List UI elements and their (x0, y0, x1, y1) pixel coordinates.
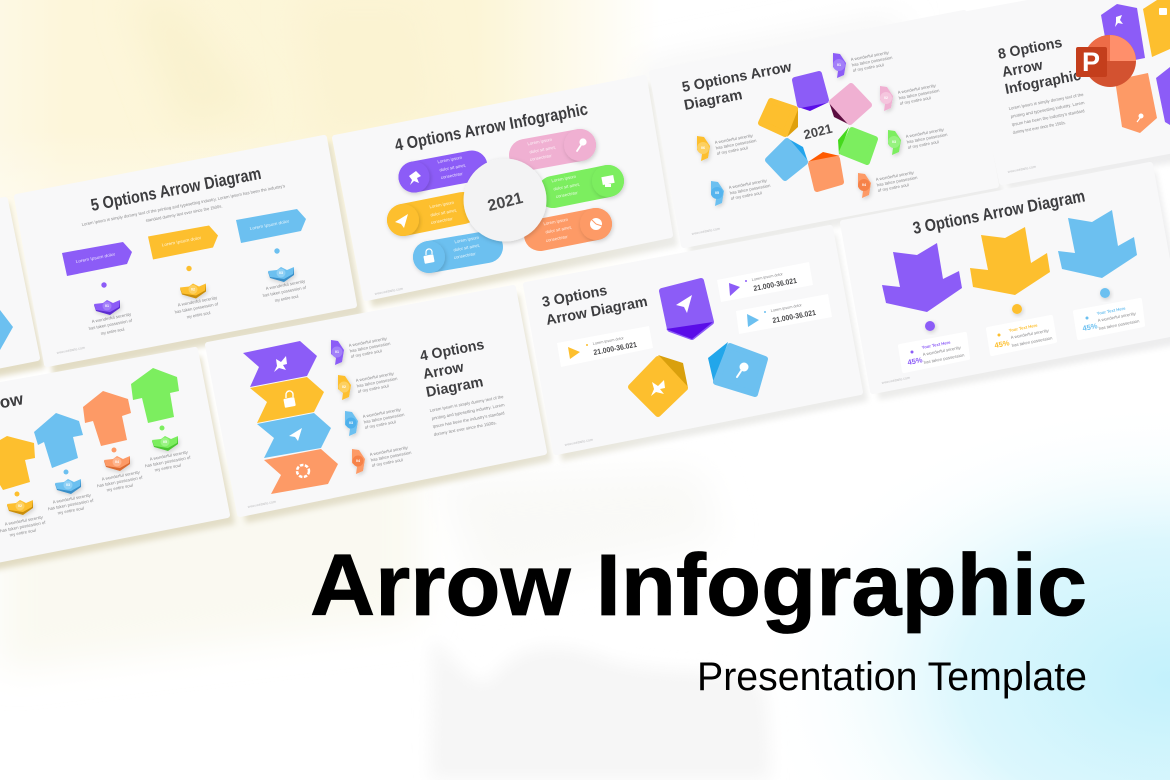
callout 1 purple: has taken possession (851, 55, 893, 67)
card purple: has taken possession (923, 352, 965, 365)
option 1 purple: 01 (105, 304, 109, 308)
node dots (925, 288, 1110, 331)
callout 5 blue (711, 178, 771, 206)
body text (429, 394, 505, 437)
arrow purple (882, 243, 962, 312)
callout 1 purple: A wonderful serenity (850, 50, 890, 62)
panel: 3 options arrow diagram, center (526, 228, 860, 452)
panel: arrow options, bottom left (0, 350, 227, 575)
pill orange: dolor sit amet, (545, 225, 572, 235)
heading: Arrow Diagram (545, 294, 649, 329)
callout 1 (331, 336, 391, 365)
callout 5 blue: of my entire soul (730, 190, 762, 201)
pill pink (525, 129, 596, 162)
center circle 2021: 2021 (486, 190, 525, 215)
callout 1 purple (833, 50, 893, 78)
hexagon yellow (1143, 0, 1170, 57)
footer: www.website.com (247, 500, 276, 509)
data card 2 (736, 294, 832, 334)
data card 2: 21.000-36.021 (772, 308, 817, 325)
card blue: has taken possession (1098, 318, 1140, 331)
panel: 3 options arrow diagram, bottom right (843, 165, 1170, 391)
card purple (900, 334, 968, 371)
panel: 5 options arrow diagram, right (652, 13, 996, 245)
arrow orange (264, 449, 338, 494)
heading: 4 Options Arrow Infographic (393, 100, 589, 155)
callout 3: A wonderful serenity (362, 407, 402, 419)
card yellow (988, 317, 1055, 354)
option blue: my entire soul (57, 506, 84, 515)
pill blue: dolor sit amet, (453, 243, 480, 253)
arrow yellow (970, 227, 1050, 295)
callout 3 green (888, 127, 948, 155)
heading: 5 Options Arrow Diagram (89, 164, 263, 215)
pill pink: Lorem ipsum (527, 137, 553, 146)
data card 1: 21.000-36.021 (753, 276, 798, 293)
card blue (1075, 300, 1143, 338)
callout 6 yellow (697, 133, 757, 161)
callout 6 yellow: of my entire soul (716, 145, 748, 156)
heading: 8 Options (997, 35, 1064, 63)
callout 3: of my entire soul (364, 419, 396, 430)
arrow blue (34, 413, 83, 468)
icon: magnifier (1137, 114, 1144, 122)
hexagon orange (1115, 73, 1157, 133)
data card 3: 21.000-36.021 (593, 340, 638, 357)
callout 5 blue: 05 (715, 191, 719, 195)
callout 3: has taken possession (363, 412, 405, 424)
callout 4 orange: 04 (862, 183, 866, 187)
callout 4 (352, 445, 412, 474)
pill yellow: dolor sit amet, (430, 208, 457, 218)
callout 3: 03 (349, 421, 353, 425)
body text (1008, 92, 1085, 135)
2021 label: 2021 (802, 121, 834, 142)
option 2 yellow: A wonderful serenity (177, 295, 218, 307)
card yellow: Your Text Here (1008, 322, 1038, 333)
callout 1 purple: 01 (837, 63, 841, 67)
option orange (97, 448, 144, 492)
body text: printing and typesetting industry. Lorem (1010, 100, 1085, 119)
option orange: my entire soul (106, 483, 133, 492)
arrow green (131, 368, 179, 423)
callout 6 yellow: 06 (701, 146, 705, 150)
icon: powerpoint logo (1076, 35, 1136, 87)
card yellow: A wonderful serenity (1010, 328, 1050, 340)
card blue: 45% (1082, 321, 1098, 333)
option yellow: 02 (18, 504, 22, 508)
pin blue (708, 342, 765, 394)
card yellow: 45% (994, 338, 1010, 350)
arrow icons (274, 356, 309, 477)
option green: has taken possession of (145, 455, 192, 468)
pill yellow (387, 200, 463, 236)
option orange: A wonderful serenity (101, 469, 141, 482)
panel: 5 options arrow diagram, left (17, 138, 354, 364)
pill purple: Lorem ipsum (437, 155, 463, 164)
option green: A wonderful serenity (149, 449, 189, 462)
callout 2 (338, 371, 398, 400)
heading: Diagram (683, 87, 744, 114)
body text: dummy text ever since the 1500s. (1012, 120, 1066, 135)
heading: Arrow (1001, 57, 1045, 81)
panel: 4 options arrow infographic (335, 78, 670, 298)
heading: 3 Options Arrow Diagram (911, 186, 1087, 238)
heading: 5 Options Arrow (681, 59, 793, 96)
card purple: Your Text Here (921, 339, 951, 350)
option yellow: A wonderful serenity (4, 514, 44, 527)
pill purple: dolor sit amet, (439, 163, 466, 173)
callout 4: A wonderful serenity (369, 445, 409, 457)
arrow orange (83, 391, 131, 446)
callout 2 pink (880, 83, 940, 111)
callout 4 orange: has taken possession (876, 175, 918, 187)
callout 1 purple: of my entire soul (852, 62, 884, 73)
option 2 yellow: my entire soul (186, 310, 211, 319)
body text: dummy text ever since the 1500s. (433, 420, 497, 437)
option yellow: my entire soul (9, 528, 36, 537)
callout 4: has taken possession (370, 450, 412, 462)
pill green (551, 165, 624, 199)
icon: powerpoint logo: P (1082, 47, 1100, 77)
center circle 2021 (464, 158, 546, 242)
option orange: 04 (115, 460, 119, 464)
callout 1: A wonderful serenity (348, 336, 388, 348)
option 2 yellow: Lorem Ipsum dolor (161, 235, 202, 247)
data card 1: Lorem ipsum dolor (751, 272, 784, 282)
heading (997, 35, 1082, 98)
data card 3: Lorem ipsum dolor (592, 336, 625, 346)
callout 2 pink: of my entire soul (899, 95, 931, 106)
pill pink: consectetur (529, 153, 553, 162)
option blue: 03 (66, 483, 70, 487)
option yellow: has taken possession of (0, 520, 47, 533)
pill blue: consectetur (453, 251, 477, 260)
option 1 purple: my entire soul (100, 327, 125, 336)
footer: www.website.com (1007, 165, 1036, 174)
callout 4: of my entire soul (371, 457, 403, 468)
footer: www.website.com (691, 227, 720, 236)
pill blue (413, 235, 487, 273)
option blue: A wonderful serenity (52, 492, 92, 505)
pill purple (398, 155, 472, 192)
panel: 4 options arrow diagram (208, 288, 544, 514)
data card 3 (557, 326, 653, 367)
petal flower (761, 74, 875, 189)
pill pink: dolor sit amet, (529, 145, 556, 155)
footer: www.website.com (374, 287, 403, 296)
arrow purple (243, 341, 317, 387)
card yellow: has taken possession (1011, 335, 1053, 348)
icon: lock (1159, 8, 1167, 15)
callout 1: of my entire soul (350, 348, 382, 359)
callout 2: A wonderful serenity (355, 371, 395, 383)
blue arrow fragment (0, 310, 13, 350)
callout 4: 04 (356, 459, 360, 463)
option green: 05 (163, 440, 167, 444)
body text: printing and typesetting industry. Lorem (431, 402, 505, 421)
arrow blue (257, 413, 331, 458)
heading (419, 337, 486, 401)
data card 2: Lorem ipsum dolor (770, 303, 803, 313)
option blue: has taken possession of (48, 498, 95, 511)
subtitle: Presentation Template (697, 655, 1087, 699)
heading (681, 59, 793, 114)
icon: pin (1115, 15, 1123, 27)
callout 2 pink: has taken possession (898, 88, 940, 100)
option 1 purple (62, 242, 133, 336)
callout 2 pink: A wonderful serenity (897, 83, 937, 95)
pill green: Lorem ipsum (551, 174, 577, 183)
panel: far left slide (0, 200, 37, 415)
intro text: standard dummy text ever since the 1500s. (145, 203, 223, 223)
callout 3 green: has taken possession (906, 132, 948, 144)
arrow yellow (250, 377, 324, 423)
option 3 blue: Lorem Ipsum dolor (249, 218, 290, 231)
option 1 purple: Lorem Ipsum dolor (75, 251, 116, 264)
card blue: Your Text Here (1096, 305, 1126, 316)
callout 4 orange (858, 170, 918, 198)
heading: Infographic (1004, 68, 1082, 98)
option blue (48, 470, 95, 515)
intro text: Lorem Ipsum is simply dummy text of the printing and typesetting industry. Lorem Ipsum has been the industry's (81, 183, 286, 227)
callout 1: has taken possession (349, 341, 391, 353)
hexagon purple lower (1156, 67, 1170, 125)
title: Arrow Infographic (310, 537, 1087, 634)
data card 1 (717, 262, 813, 302)
callout 3 green: A wonderful serenity (905, 127, 945, 139)
arrow yellow (0, 436, 35, 490)
footer: www.website.com (881, 376, 910, 385)
heading: Arrow (422, 359, 466, 383)
heading: 3 Options (541, 283, 609, 311)
pill green: consectetur (555, 190, 579, 199)
pin yellow (631, 355, 688, 414)
option 2 yellow (148, 226, 219, 319)
option green: my entire soul (154, 463, 181, 472)
option 3 blue: my entire soul (274, 294, 299, 303)
callout 3 green: of my entire soul (907, 139, 939, 150)
body text: Ipsum has been the industry's standard (1011, 108, 1085, 127)
body text: Ipsum has been the industry's standard (432, 410, 505, 429)
callout 6 yellow: has taken possession (715, 138, 757, 150)
option orange: has taken possession of (97, 475, 144, 488)
option 3 blue (236, 209, 307, 303)
callout 2: 02 (342, 385, 346, 389)
footer: www.website.com (564, 438, 593, 447)
pill green: dolor sit amet, (553, 182, 580, 192)
body text: Lorem Ipsum is simply dummy text of the (1008, 92, 1084, 111)
callout 3 green: 03 (892, 140, 896, 144)
pill orange (540, 208, 612, 243)
pill yellow: consectetur (430, 216, 454, 225)
option 1 purple: has taken possession of (88, 318, 133, 331)
card purple: A wonderful serenity (922, 345, 962, 357)
pin purple (662, 281, 713, 339)
callout 1: 01 (335, 350, 339, 354)
footer: www.website.com (56, 346, 85, 355)
option 2 yellow: has taken possession of (174, 301, 219, 314)
panel: 8 options arrow infographic (968, 0, 1170, 182)
heading: Diagram (425, 374, 485, 401)
option green (145, 426, 192, 472)
option 1 purple: A wonderful serenity (91, 311, 132, 324)
heading: 4 Options (419, 337, 486, 365)
pill orange: Lorem ipsum (543, 217, 569, 226)
option 3 blue: 03 (279, 271, 283, 275)
callout 2: of my entire soul (357, 383, 389, 394)
callout 2 pink: 02 (884, 96, 888, 100)
slide decks (0, 0, 1170, 575)
arrow blue (1058, 210, 1137, 278)
callout 2: has taken possession (356, 376, 398, 388)
slide shadows (0, 0, 1170, 584)
option yellow (0, 492, 47, 537)
body text: Lorem Ipsum is simply dummy text of the (429, 394, 504, 413)
card purple: 45% (907, 355, 923, 367)
callout 4 orange: of my entire soul (877, 182, 909, 193)
callout 5 blue: has taken possession (729, 183, 771, 195)
hexagon purple (1101, 4, 1145, 65)
callout 5 blue: A wonderful serenity (728, 178, 768, 190)
callout 3 (345, 407, 405, 436)
option 3 blue: A wonderful serenity (265, 278, 306, 291)
callout 4 orange: A wonderful serenity (875, 170, 915, 182)
pill orange: consectetur (545, 234, 569, 243)
pill blue: Lorem ipsum (454, 235, 480, 244)
pill yellow: Lorem ipsum (429, 200, 455, 209)
option 2 yellow: 02 (191, 288, 195, 292)
callout 6 yellow: A wonderful serenity (714, 133, 754, 145)
option 3 blue: has taken possession of (262, 285, 307, 298)
pill purple: consectetur (440, 171, 464, 180)
card blue: A wonderful serenity (1097, 311, 1137, 323)
